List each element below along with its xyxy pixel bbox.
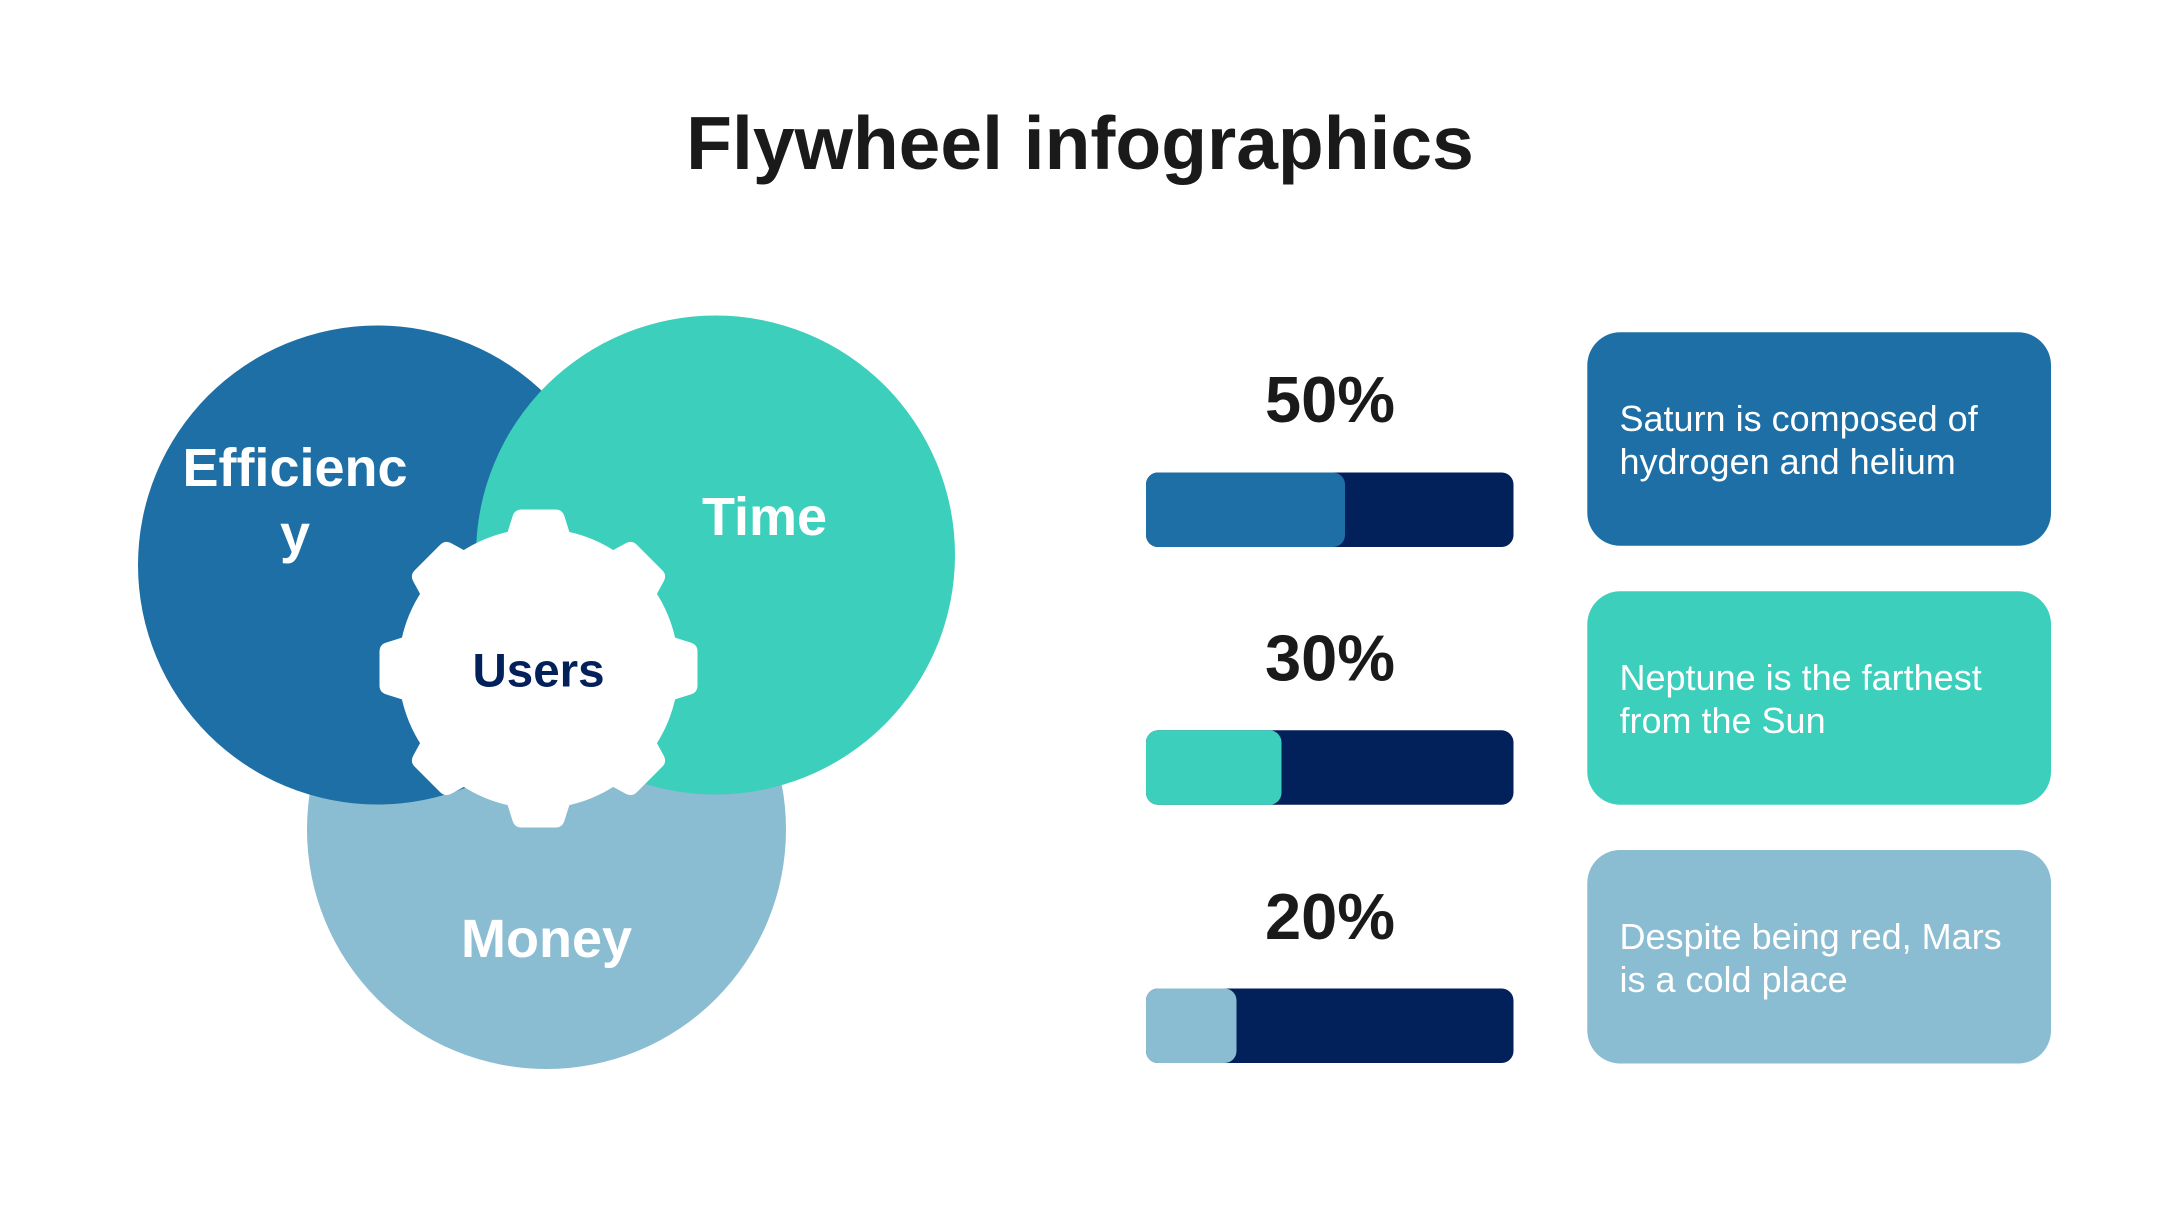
progress bar: 20%: [1146, 988, 1514, 1063]
circle: time: [476, 316, 955, 794]
circle: money: [307, 590, 786, 1069]
panel: flywheel diagram: [138, 316, 955, 1069]
title: Flywheel infographics: [686, 101, 1474, 185]
card: Mars: is a cold place: [1620, 959, 1848, 1000]
circle: money: Money: [461, 909, 632, 969]
card: Saturn: Saturn is composed of: [1620, 398, 1979, 439]
icon: gear with users label: [380, 510, 698, 828]
panel: 20% stat: [1146, 880, 1514, 1063]
circle: efficiency: Efficienc: [182, 438, 408, 498]
circle: efficiency: y: [280, 504, 310, 564]
card: Mars: [1587, 850, 2051, 1064]
progress bar: 30%: [1146, 730, 1514, 805]
panel: 30% stat: [1146, 622, 1514, 805]
percentage: 30%: 30%: [1265, 622, 1395, 694]
progress bar: 50%: [1146, 472, 1514, 547]
card: Saturn: hydrogen and helium: [1620, 441, 1956, 482]
card: Mars: Despite being red, Mars: [1620, 916, 2002, 957]
percentage: 20%: 20%: [1265, 880, 1395, 953]
card: Neptune: Neptune is the farthest: [1620, 657, 1982, 698]
card: Saturn: [1587, 332, 2051, 546]
card: Neptune: [1587, 591, 2051, 805]
circle: efficiency: [138, 326, 617, 804]
panel: 50% stat: [1146, 363, 1514, 547]
circle: time: Time: [702, 487, 827, 547]
card: Neptune: from the Sun: [1620, 700, 1826, 741]
percentage: 50%: 50%: [1265, 363, 1395, 436]
icon: gear with users label: Users: [472, 644, 605, 698]
